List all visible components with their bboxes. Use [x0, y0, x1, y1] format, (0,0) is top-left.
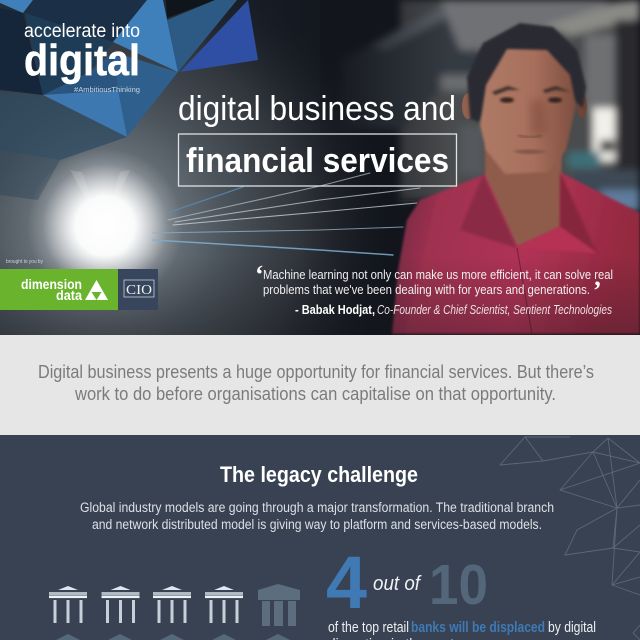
portrait: Babak Hodjat — [392, 23, 640, 334]
nose — [530, 100, 548, 135]
polygon graphic: blue facets — [0, 0, 258, 200]
quote: ’ — [593, 276, 602, 305]
statistic caption: by digital — [548, 620, 596, 636]
collar highlight — [517, 227, 597, 253]
statistic: 4 out of 10 — [326, 541, 488, 624]
main heading: financial services — [186, 142, 449, 180]
intro text — [38, 361, 594, 404]
shirt — [392, 172, 640, 334]
photo background: office ceiling — [340, 0, 640, 212]
collar right — [560, 172, 597, 253]
main heading: digital business and — [178, 90, 456, 128]
neck — [485, 145, 562, 246]
face — [480, 49, 576, 174]
statistic: 4 out of 10: out of — [373, 573, 422, 595]
body text: Global industry models are going through a major transformation. The traditional branch — [80, 500, 554, 515]
quote: problems that we've been dealing with for years and generations. — [263, 282, 590, 297]
bank icons second row — [56, 634, 290, 640]
quote: - Babak Hodjat, — [295, 302, 375, 317]
eyebrows — [492, 86, 571, 95]
light flare — [27, 148, 183, 304]
campaign title: #AmbitiousThinking — [74, 85, 140, 94]
panel: hero banner — [0, 0, 640, 335]
heading: The legacy challenge — [220, 462, 418, 487]
statistic caption: of the top retail — [328, 620, 409, 636]
logo: Dimension Data: dimension — [21, 277, 82, 292]
statistic: 4 out of 10: 10 — [429, 553, 488, 617]
collar left — [460, 175, 517, 248]
campaign title: digital — [24, 36, 140, 85]
bank icons row — [49, 584, 300, 626]
intro text: work to do before organisations can capitalise on that opportunity. — [74, 383, 556, 404]
logo: Dimension Data: data — [56, 288, 82, 303]
panel: introduction — [0, 335, 640, 435]
eyes — [500, 97, 562, 103]
mouth — [512, 150, 548, 154]
ears — [462, 93, 474, 119]
placket — [517, 248, 532, 334]
background glow — [0, 0, 470, 335]
campaign title — [24, 21, 140, 94]
logo: CIO — [118, 269, 158, 310]
logo: Dimension Data — [0, 269, 118, 310]
quote — [255, 260, 613, 317]
statistic: 4 out of 10: 4 — [326, 541, 367, 624]
logo: CIO: CIO — [126, 283, 152, 298]
main heading — [178, 90, 456, 186]
light rays — [153, 173, 420, 255]
hair — [467, 23, 586, 122]
body text: and network distributed model is giving way to platform and services-based models. — [92, 517, 542, 532]
campaign title: accelerate into — [24, 21, 140, 42]
statistic caption: banks will be displaced — [411, 620, 545, 636]
sponsor label: brought to you by — [6, 259, 43, 265]
quote: ‘ — [255, 260, 264, 289]
network line decoration — [500, 437, 640, 640]
body text — [80, 500, 554, 532]
statistic caption — [328, 620, 596, 640]
panel: the legacy challenge — [0, 435, 640, 640]
